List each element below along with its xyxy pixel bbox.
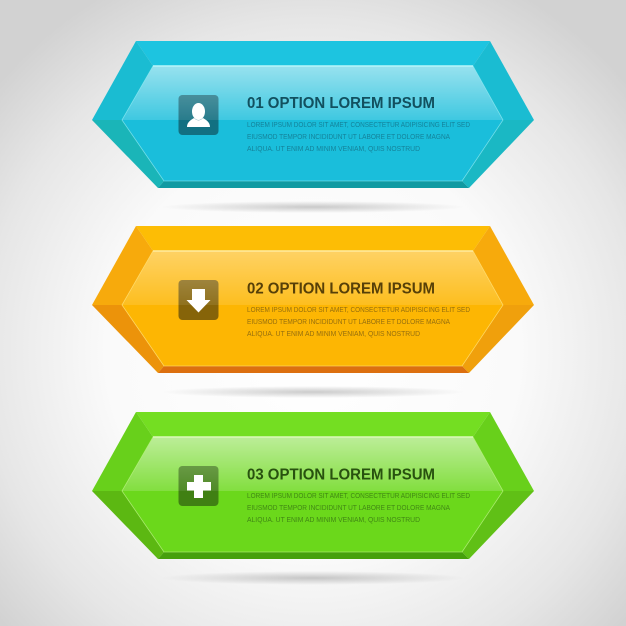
gem facets <box>92 226 534 373</box>
shadow <box>161 386 465 398</box>
body text <box>247 120 470 153</box>
body text: ALIQUA. UT ENIM AD MINIM VENIAM, QUIS NOSTRUD <box>247 515 420 524</box>
gem facets <box>92 41 534 188</box>
panel: option 01 blue <box>92 41 534 213</box>
icon: person <box>178 95 218 135</box>
body text: ALIQUA. UT ENIM AD MINIM VENIAM, QUIS NOSTRUD <box>247 144 420 153</box>
body text <box>247 305 470 338</box>
panel: option 02 orange <box>92 226 534 398</box>
panel: option 03 green <box>92 412 534 585</box>
body text: LOREM IPSUM DOLOR SIT AMET, CONSECTETUR ADIPISICING ELIT SED <box>247 120 470 129</box>
body text: EIUSMOD TEMPOR INCIDIDUNT UT LABORE ET DOLORE MAGNA <box>247 132 450 141</box>
heading: 02 OPTION LOREM IPSUM <box>247 280 435 298</box>
shadow <box>161 571 465 585</box>
icon: plus <box>178 466 218 506</box>
heading: 03 OPTION LOREM IPSUM <box>247 466 435 484</box>
heading: 01 OPTION LOREM IPSUM <box>247 95 435 112</box>
body text <box>247 491 470 524</box>
body text: LOREM IPSUM DOLOR SIT AMET, CONSECTETUR ADIPISICING ELIT SED <box>247 305 470 314</box>
body text: ALIQUA. UT ENIM AD MINIM VENIAM, QUIS NOSTRUD <box>247 329 420 338</box>
shadow <box>161 201 465 213</box>
gem facets <box>92 412 534 559</box>
body text: EIUSMOD TEMPOR INCIDIDUNT UT LABORE ET DOLORE MAGNA <box>247 503 450 512</box>
body text: LOREM IPSUM DOLOR SIT AMET, CONSECTETUR ADIPISICING ELIT SED <box>247 491 470 500</box>
icon: down arrow <box>178 280 218 320</box>
body text: EIUSMOD TEMPOR INCIDIDUNT UT LABORE ET DOLORE MAGNA <box>247 317 450 326</box>
